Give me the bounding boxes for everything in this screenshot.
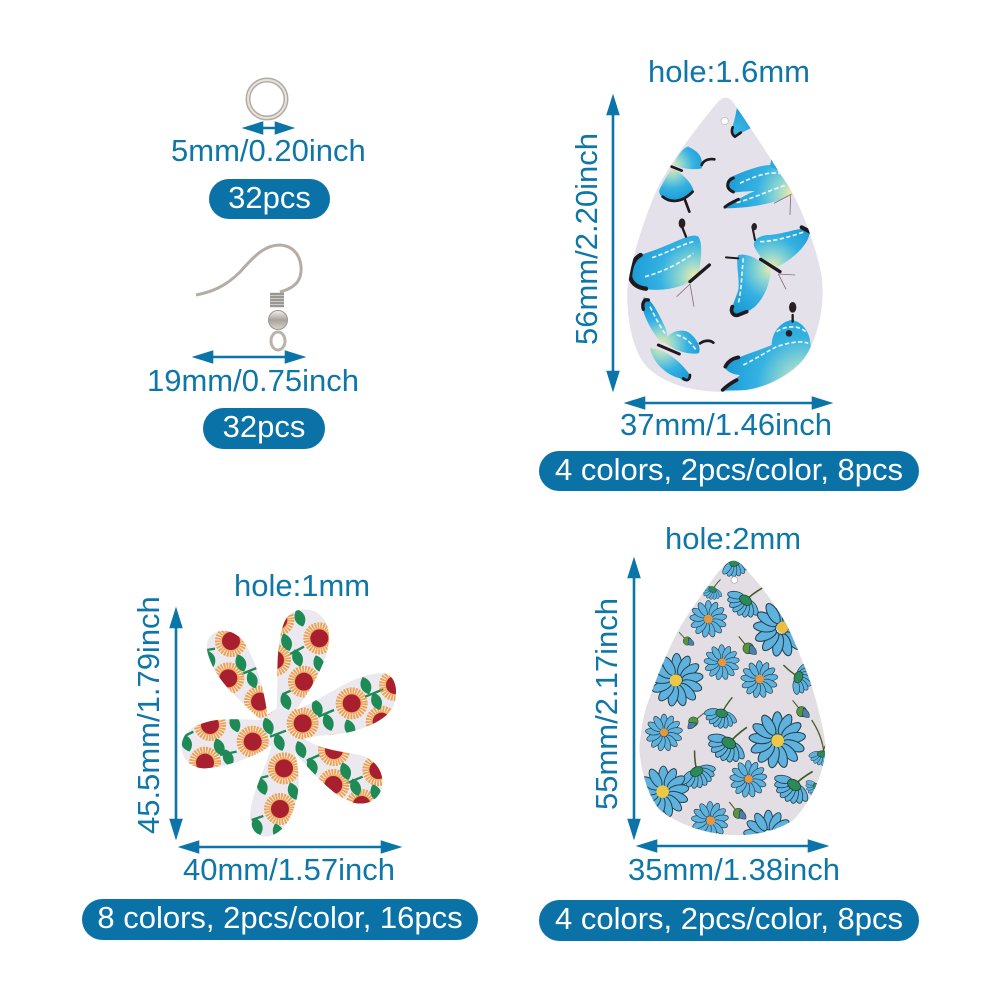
dimension: width: 37mm/1.46inch <box>620 407 832 442</box>
quantity badge: hooks: 32pcs <box>223 409 305 444</box>
hole label: hole:2mm <box>665 521 801 556</box>
panel: jump ring <box>171 80 366 219</box>
quantity badge: 4 colors, 2pcs/color, 8pcs <box>555 901 903 936</box>
dimension: ring size: 5mm/0.20inch <box>171 133 366 168</box>
arrow: width <box>182 842 398 852</box>
panel: earring hook <box>147 245 359 449</box>
panel: sunflower flower pendant <box>82 568 478 940</box>
quantity badge: rings <box>209 179 330 219</box>
arrow: height <box>608 98 618 388</box>
arrow: width <box>628 398 829 408</box>
dimension: height: 55mm/2.17inch <box>589 598 624 810</box>
pendant: sunflower flower shape <box>179 608 407 843</box>
dimension: height: 56mm/2.20inch <box>569 133 604 345</box>
quantity badge: 8 colors, 2pcs/color, 16pcs <box>97 900 463 935</box>
dimension: hook size: 19mm/0.75inch <box>147 363 359 398</box>
pendant: butterfly teardrop <box>627 98 823 392</box>
pendant: daisy teardrop <box>639 560 826 835</box>
quantity badge: rings: 32pcs <box>228 180 311 215</box>
arrow: hook width <box>196 352 302 362</box>
icon: silver jump ring <box>248 80 286 118</box>
panel: butterfly teardrop pendant <box>539 54 919 491</box>
arrow: height <box>171 611 181 836</box>
dimension: height: 45.5mm/1.79inch <box>131 596 166 834</box>
hole label: hole:1.6mm <box>648 54 810 89</box>
quantity badge: hooks <box>203 408 325 449</box>
panel: daisy teardrop pendant <box>539 521 919 941</box>
hole label: hole:1mm <box>234 568 370 603</box>
quantity badge: 4 colors, 2pcs/color, 8pcs <box>555 452 903 487</box>
arrow: width <box>640 841 825 851</box>
dimension: width: 40mm/1.57inch <box>183 852 395 887</box>
dimension: width: 35mm/1.38inch <box>628 852 840 887</box>
infographic: earring kit components and dimensions <box>82 60 919 941</box>
icon: earring hook <box>196 245 301 350</box>
arrow: height <box>629 561 639 836</box>
arrow: ring width <box>246 123 291 133</box>
